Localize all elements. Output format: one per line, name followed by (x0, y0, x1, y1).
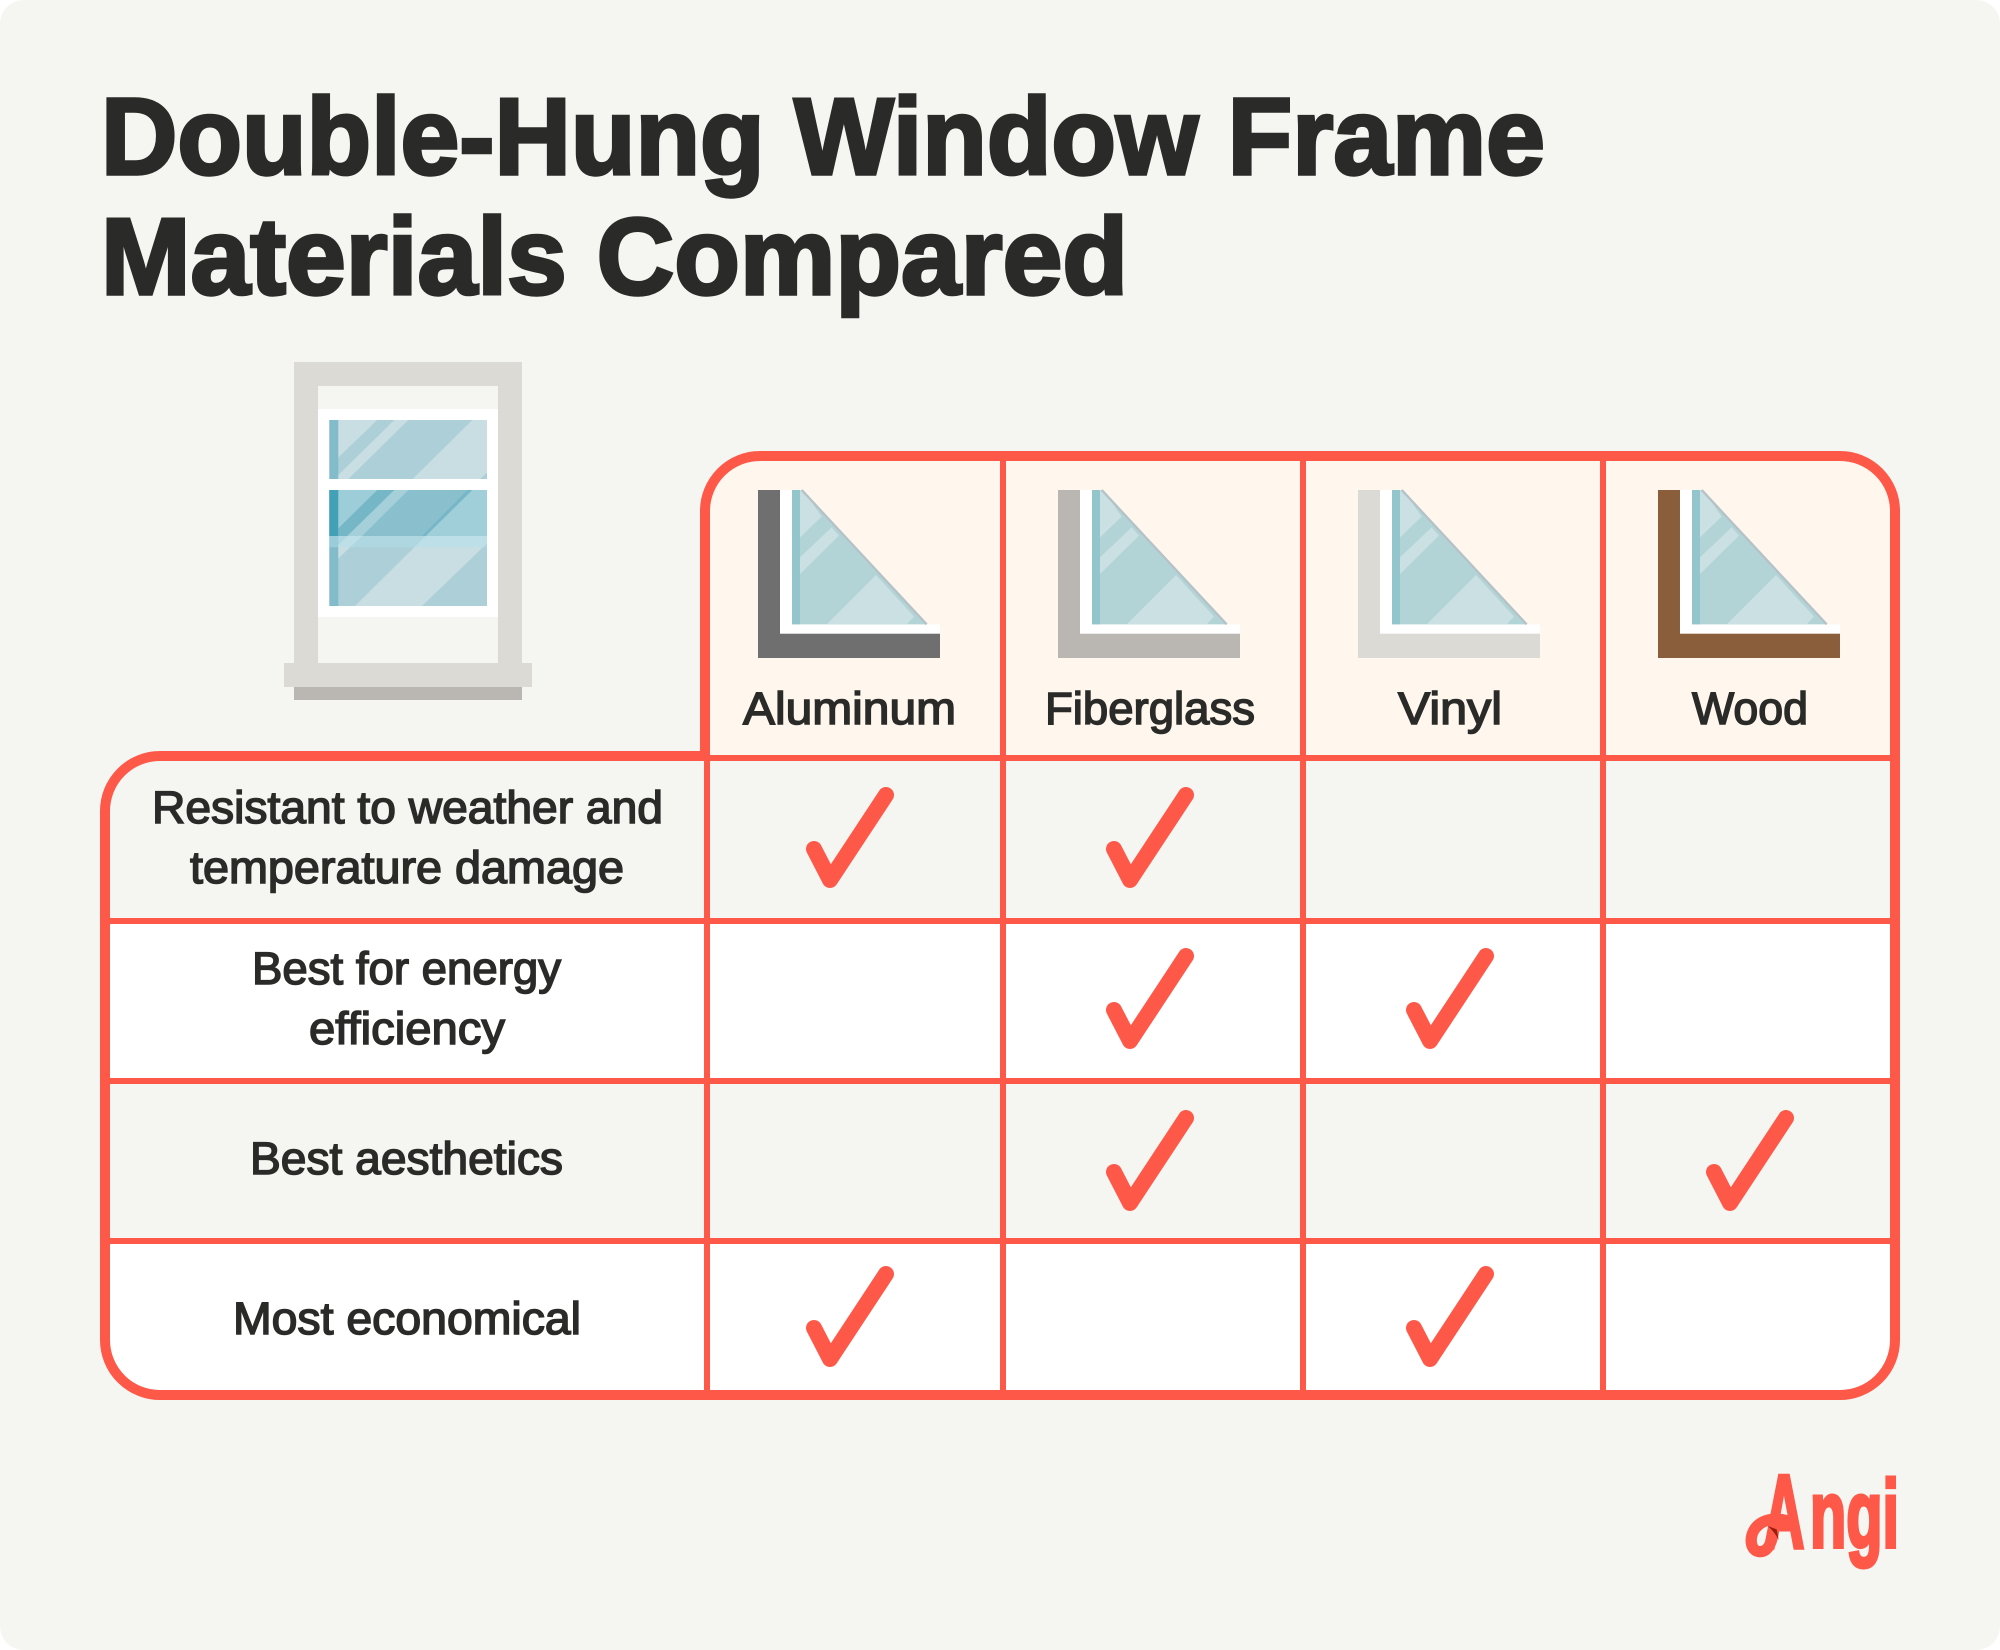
panel: header background (705, 456, 1895, 756)
icon: aluminum frame (758, 490, 940, 658)
table grid lines (105, 456, 1895, 1395)
checkmark: aluminum, weather (814, 795, 886, 880)
row label: resistant to weather and temperature damage (152, 782, 663, 893)
icon: vinyl frame (1358, 490, 1540, 658)
title (101, 76, 1545, 318)
checkmark: fiberglass, weather (1114, 795, 1186, 880)
label: Fiberglass: Fiberglass (1045, 683, 1255, 734)
logo: Angi: A (1764, 1454, 1804, 1569)
panel: row 1 background (105, 756, 1895, 921)
title: Double-Hung Window Frame (101, 76, 1545, 198)
logo: Angi (1751, 1454, 1899, 1569)
checkmark: vinyl, economical (1414, 1274, 1486, 1359)
column: aluminum (743, 490, 956, 734)
panel: row 2 background (105, 921, 1895, 1081)
column: vinyl (1358, 490, 1540, 734)
label: Aluminum: Aluminum (743, 683, 956, 734)
row label: resistant to weather and temperature damage: Resistant to weather and (152, 782, 663, 833)
checkmark: vinyl, energy (1414, 956, 1486, 1041)
icon: fiberglass frame (1058, 490, 1240, 658)
column: wood (1658, 490, 1840, 734)
checkmark: fiberglass, aesthetics (1114, 1118, 1186, 1203)
checkmark: fiberglass, energy (1114, 956, 1186, 1041)
panel: row 4 background (105, 1241, 1895, 1395)
logo: Angi: ngi (1810, 1461, 1899, 1568)
table outline (105, 456, 1895, 1395)
row label: best for energy efficiency (252, 943, 562, 1054)
title: Materials Compared (101, 196, 1128, 318)
row label: best aesthetics: Best aesthetics (250, 1133, 563, 1184)
panel: row 3 background (105, 1081, 1895, 1241)
label: Vinyl: Vinyl (1398, 683, 1502, 734)
checkmark: wood, aesthetics (1714, 1118, 1786, 1203)
icon: double-hung window (284, 362, 532, 700)
row label: resistant to weather and temperature damage: temperature damage (190, 842, 624, 893)
column: fiberglass (1045, 490, 1255, 734)
icon: wood frame (1658, 490, 1840, 658)
checkmark: aluminum, economical (814, 1274, 886, 1359)
label: Wood: Wood (1692, 683, 1808, 734)
row label: best for energy efficiency: efficiency (309, 1003, 506, 1054)
row label: most economical: Most economical (233, 1293, 581, 1344)
table (105, 456, 1895, 1395)
row label: best for energy efficiency: Best for energy (252, 943, 562, 994)
